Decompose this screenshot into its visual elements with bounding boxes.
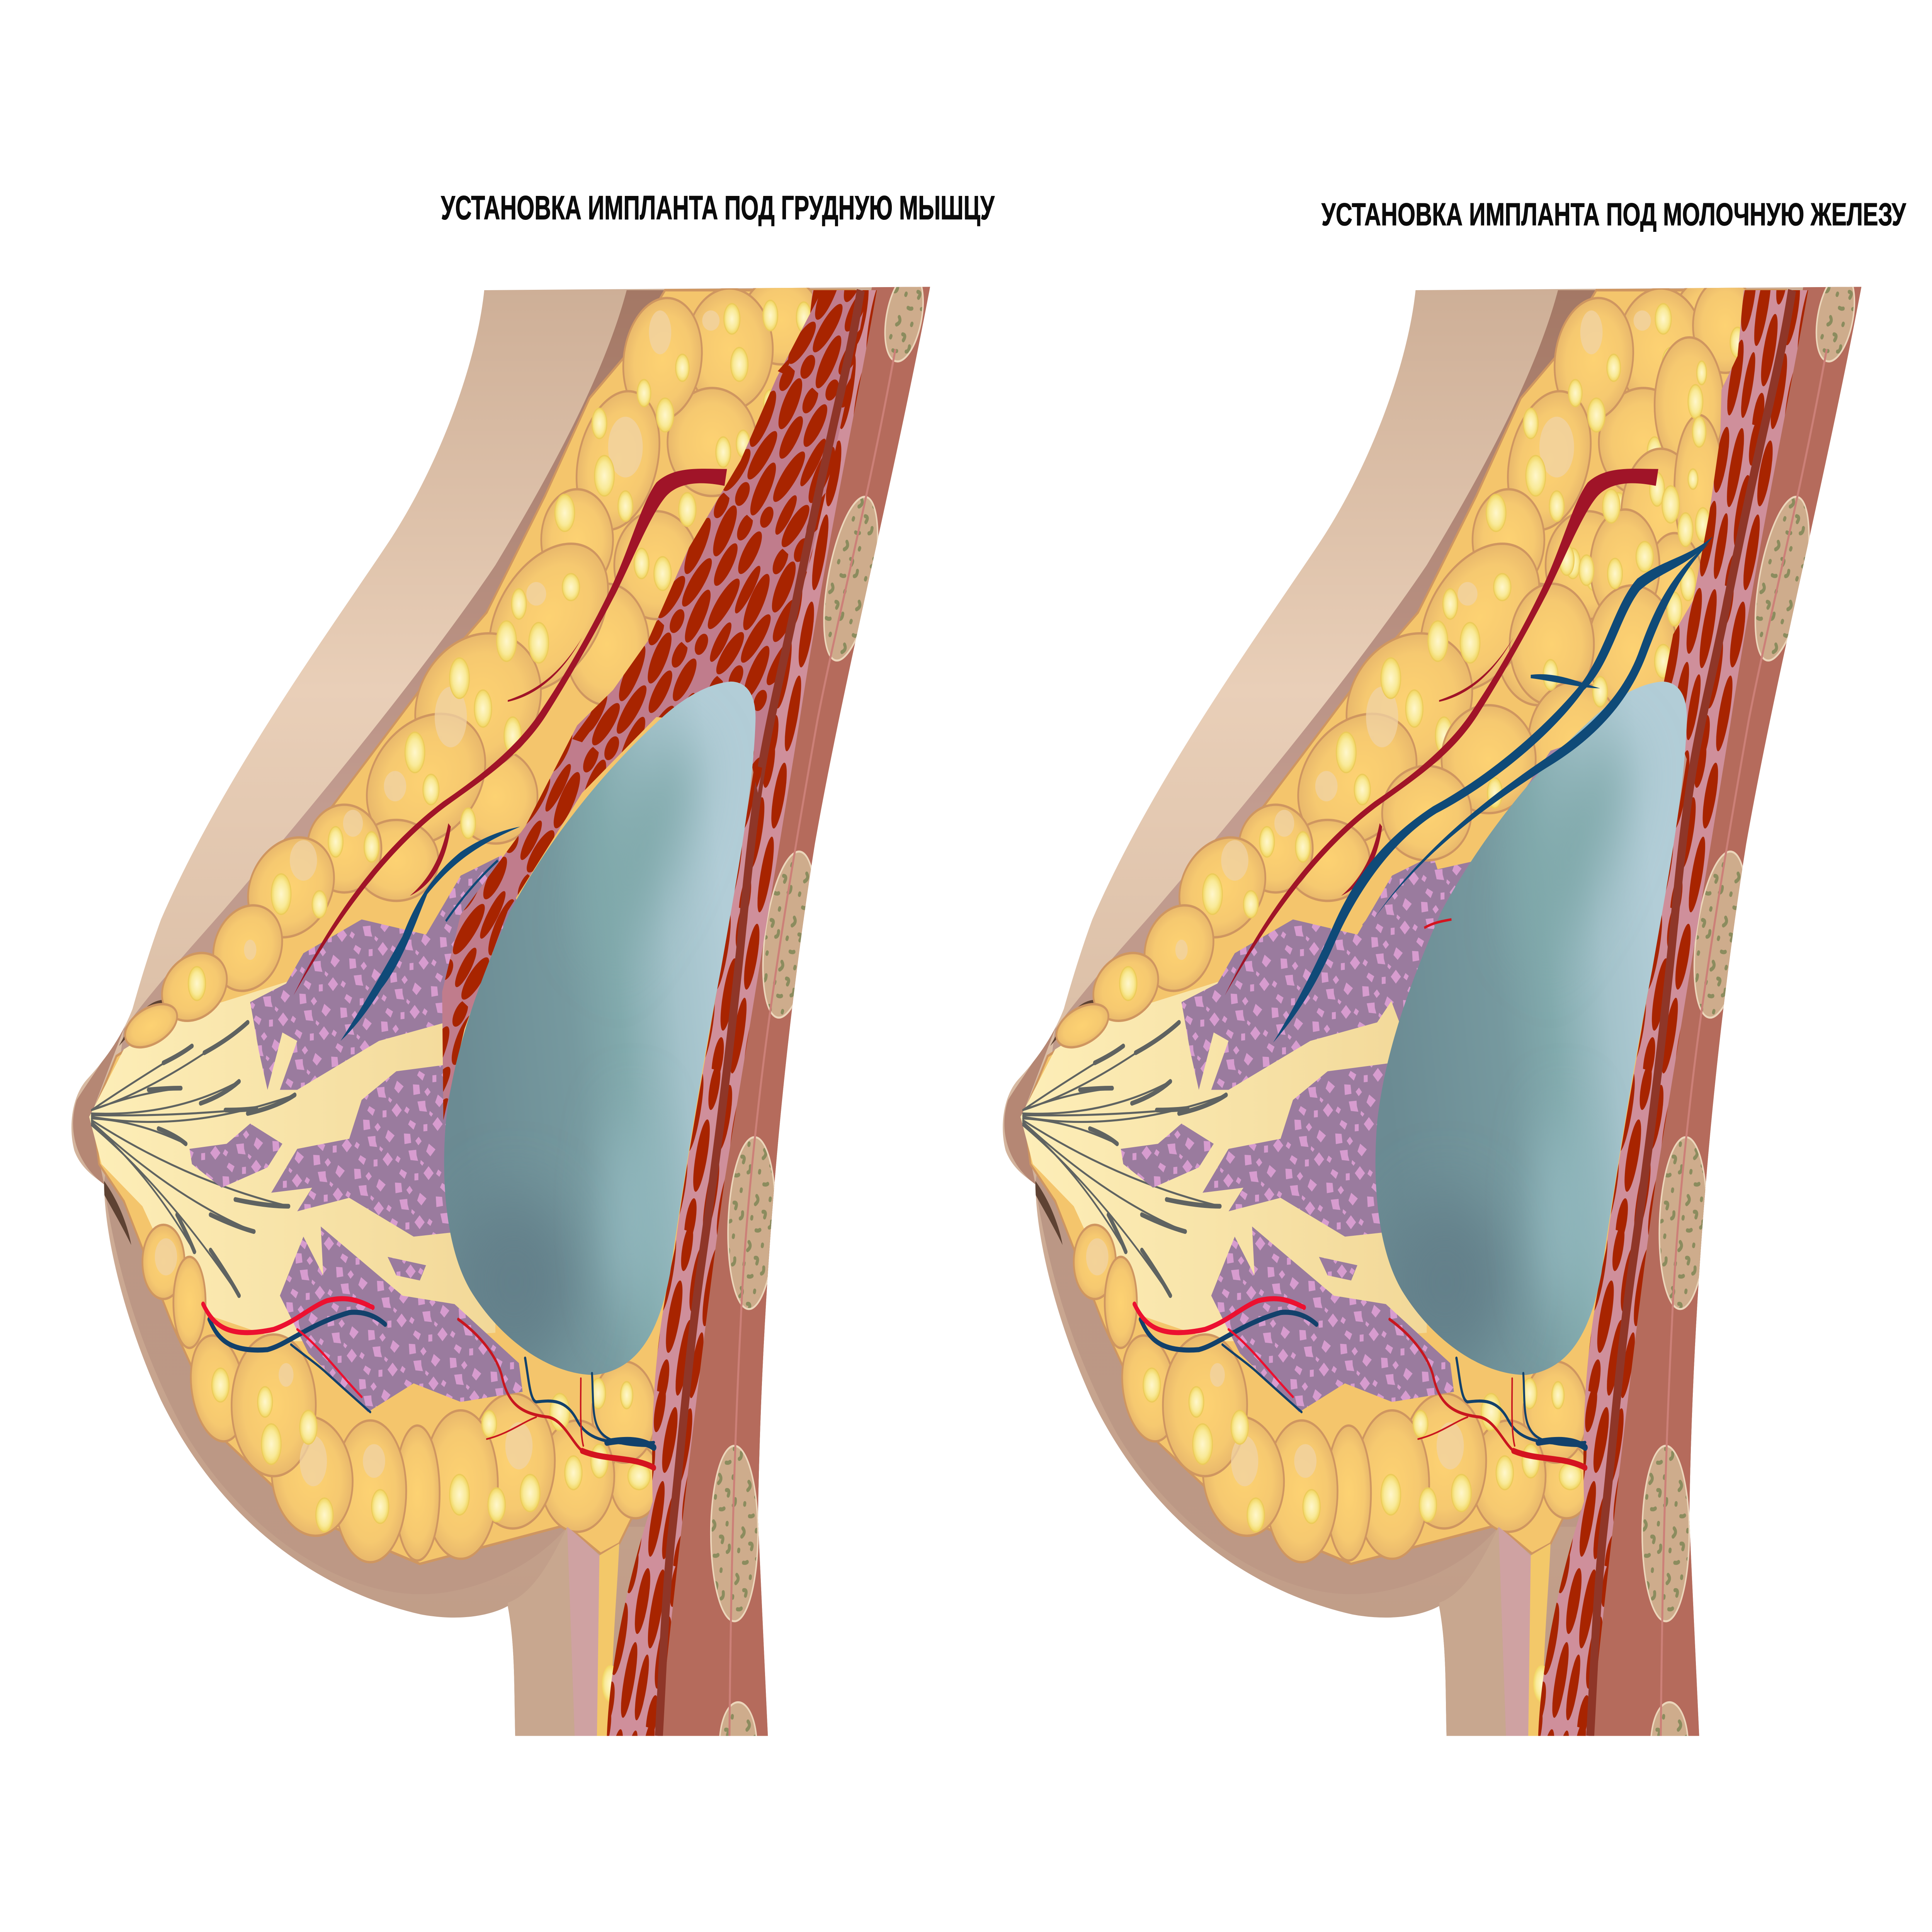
vessels <box>203 1299 654 1468</box>
artery <box>1225 469 1658 995</box>
artery <box>294 469 727 995</box>
main vein <box>1273 536 1713 1043</box>
pectoral fraying edge <box>572 317 827 742</box>
milk ducts <box>92 1022 295 1296</box>
chest wall thin line <box>730 349 895 1736</box>
chest wall <box>650 278 941 1746</box>
main artery <box>294 469 727 995</box>
heading: under pectoral muscle: УСТАНОВКА ИМПЛАНТА ПОД ГРУДНУЮ МЫШЦУ <box>441 189 995 227</box>
subcutaneous band <box>104 290 941 1594</box>
fat base <box>93 290 855 1564</box>
duct thick ends <box>149 1022 295 1296</box>
ribs <box>711 267 930 1787</box>
large vein <box>1273 536 1713 1043</box>
lower vessels <box>1134 1299 1585 1468</box>
glandular yellow area with ducts base <box>89 945 495 1341</box>
breast implant <box>444 682 755 1375</box>
upper fat lobules <box>121 277 821 1056</box>
shared breast anatomy <box>981 267 1885 1787</box>
additional fat globules <box>1487 327 1745 808</box>
glandular lobes <box>189 855 523 1412</box>
fascia over pectoral <box>762 290 861 768</box>
vein branch <box>446 861 498 921</box>
implant body <box>444 682 755 1375</box>
artery branches <box>410 638 582 896</box>
lower inframammary tissue and neck <box>508 1527 575 1736</box>
breast implant <box>1376 682 1687 1375</box>
deep muscle strip <box>1538 290 1808 1736</box>
panel: implant under mammary gland <box>981 267 1885 1787</box>
deep muscle strip <box>607 290 877 1736</box>
duct hairlines <box>92 1022 295 1296</box>
vein in upper breast <box>340 827 520 1041</box>
pink tissue above implant <box>1516 742 1575 827</box>
heading: under mammary gland: УСТАНОВКА ИМПЛАНТА ПОД МОЛОЧНУЮ ЖЕЛЕЗУ <box>1321 197 1906 232</box>
panel: implant under pectoral muscle <box>49 267 954 1787</box>
skin <box>49 278 954 1746</box>
lower-right vessels <box>525 1358 654 1443</box>
additional fat lobules <box>1382 278 1757 861</box>
lower-left vessels <box>209 1312 385 1350</box>
small vessels above implant <box>1424 919 1451 928</box>
dark fascia band <box>659 290 861 1736</box>
shared breast anatomy <box>49 267 954 1787</box>
muscle along chest wall <box>607 290 877 1736</box>
additional glandular lobe <box>1362 827 1551 1029</box>
nipple <box>73 1015 129 1184</box>
small vein branch <box>1531 674 1600 688</box>
implant shading <box>452 721 713 1367</box>
second vein branch <box>1375 543 1709 918</box>
skin creases <box>104 1000 171 1245</box>
fat highlights <box>155 310 719 1486</box>
fat globules <box>188 300 811 1532</box>
lower fat lobules <box>143 1225 660 1562</box>
pectoral muscle over implant <box>442 290 867 1120</box>
